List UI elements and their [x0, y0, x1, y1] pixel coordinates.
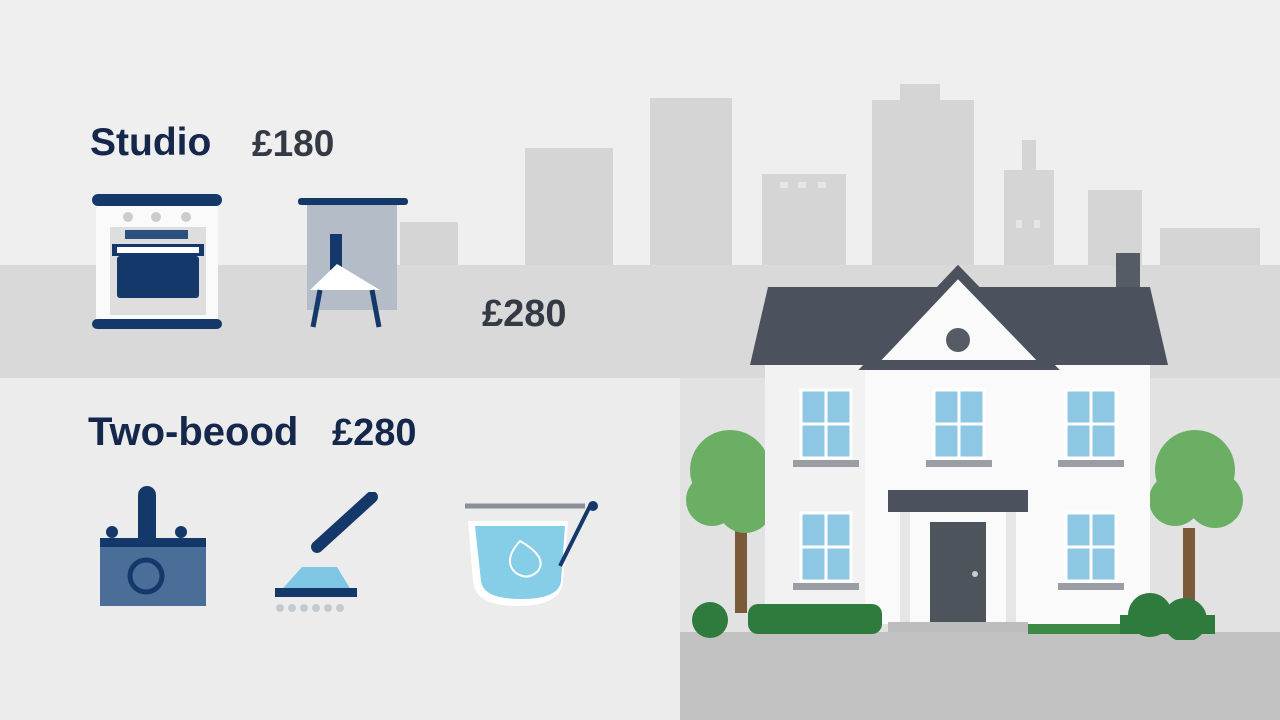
- lower right: [680, 378, 1280, 720]
- windows: [801, 390, 1116, 581]
- porch and door: [888, 490, 1028, 512]
- skyline: [400, 84, 1260, 278]
- icon: oven: [92, 194, 222, 329]
- icon: mop: [275, 492, 378, 612]
- lower left panel: [0, 378, 680, 720]
- trees: [686, 430, 1243, 613]
- house illustration: [686, 253, 1243, 640]
- heading: Studio: Studio: [90, 121, 211, 164]
- body: [765, 362, 1150, 624]
- chimney: [1116, 253, 1140, 303]
- hedges: [692, 593, 1215, 642]
- price: studio: £180: [252, 123, 334, 164]
- icon: sink with tap: [100, 486, 206, 606]
- roof: [750, 287, 1168, 365]
- heading: Two-bedroom: Two-beood: [88, 410, 298, 454]
- icon: bucket: [465, 501, 598, 606]
- price: two-bed: £280: [332, 412, 417, 454]
- grey band: [0, 265, 1280, 378]
- icon: clothes airer: [298, 198, 408, 328]
- price: middle: £280: [482, 293, 567, 335]
